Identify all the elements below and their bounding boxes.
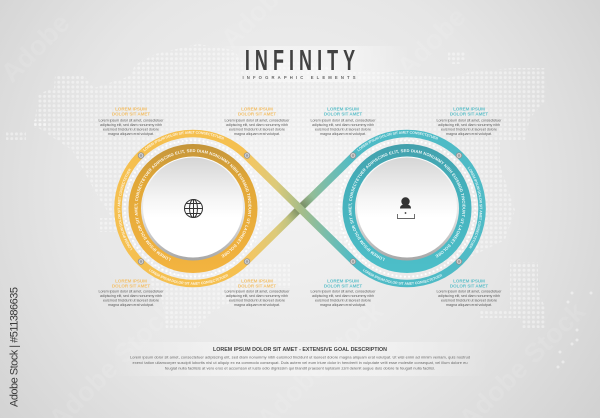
text block: teal top left: adipiscing elit, sed diam nonummy nibh xyxy=(312,123,374,127)
infinity diagram xyxy=(114,130,486,288)
icon: globe xyxy=(184,200,202,218)
text block: teal bottom left: Lorem ipsum dolor sit amet, consectetuer xyxy=(310,290,376,294)
text block: orange top right: DOLOR SIT AMET xyxy=(238,112,276,116)
text block: teal top left: Lorem ipsum dolor sit amet, consectetuer xyxy=(310,118,376,122)
text block: orange bottom left: Lorem ipsum dolor sit amet, consectetuer xyxy=(98,290,164,294)
dotted world map xyxy=(6,44,546,330)
right inner ring xyxy=(342,144,472,273)
right ring text: LOREM IPSUM DOLOR SIT AMET CONSECTETUER xyxy=(468,166,482,248)
text block: teal bottom right: Lorem ipsum dolor sit amet, consectetuer xyxy=(436,290,502,294)
text block: teal top left: euismod tincidunt ut laoreet dolore xyxy=(315,128,371,132)
text block: teal bottom left: DOLOR SIT AMET xyxy=(324,284,362,288)
text block: orange bottom right: LOREM IPSUM xyxy=(241,278,273,284)
text block: teal top right: DOLOR SIT AMET xyxy=(450,112,488,116)
description strip xyxy=(110,342,490,376)
text block: orange bottom right xyxy=(224,278,290,307)
description body: feugiat nulla facilisis at vero eros et accumsan et iusto odio dignissim qui blandit praesent luptatum zzril delenit augue duis dolore te feugait nulla facilisi. xyxy=(165,366,435,370)
text block: teal top right xyxy=(436,106,502,136)
text block: teal bottom left: adipiscing elit, sed diam nonummy nibh xyxy=(312,294,374,298)
description body: Lorem ipsum dolor sit amet, consectetuer adipiscing elit, sed diam nonummy nibh euismod tincidunt ut laoreet dolore magna aliquam erat volutpat. Ut wisi enim ad minim veniam, quis nostrud xyxy=(130,354,470,360)
title strip xyxy=(215,46,410,82)
text block: teal top right: adipiscing elit, sed diam nonummy nibh xyxy=(438,123,500,127)
crossing band: falling xyxy=(246,156,354,262)
text block: teal top right: Lorem ipsum dolor sit amet, consectetuer xyxy=(436,118,502,122)
text block: orange bottom right: euismod tincidunt ut laoreet dolore xyxy=(229,298,285,302)
text block: teal bottom right: adipiscing elit, sed diam nonummy nibh xyxy=(438,294,500,298)
description body xyxy=(130,354,470,370)
text block: orange bottom left: euismod tincidunt ut laoreet dolore xyxy=(103,298,159,302)
text block: orange top right: LOREM IPSUM xyxy=(241,106,273,112)
left ring text: LOREM IPSUM DOLOR SIT AMET CONSECTETUER xyxy=(118,168,132,250)
text block: teal bottom right: LOREM IPSUM xyxy=(453,278,485,284)
text block: orange top right: magna aliquam erat volutpat. xyxy=(234,132,280,136)
stock id vertical label: Adobe Stock | #511386635 xyxy=(8,287,20,407)
left outer band xyxy=(118,134,246,284)
map: eurasia xyxy=(300,60,546,262)
right ring text: LOREM IPSUM DOLOR SIT AMET CONSECTETUER xyxy=(357,131,438,152)
text block: orange bottom left: LOREM IPSUM xyxy=(115,278,147,284)
map: scattered dots east xyxy=(448,52,466,64)
left white disc xyxy=(141,156,245,260)
text block: orange top left: euismod tincidunt ut laoreet dolore xyxy=(103,128,159,132)
right ring text: LOREM IPSUM DOLOR SIT AMET CONSECTETUER xyxy=(362,268,442,285)
text block: orange top left: magna aliquam erat volutpat. xyxy=(108,132,154,136)
text block: orange bottom right: magna aliquam erat volutpat. xyxy=(234,303,280,307)
text block: orange bottom right: DOLOR SIT AMET xyxy=(238,284,276,288)
text block: orange bottom left: DOLOR SIT AMET xyxy=(112,284,150,288)
text block: teal top right: magna aliquam erat volutpat. xyxy=(446,132,492,136)
crossing shadow xyxy=(288,196,312,220)
right dotted ring xyxy=(339,140,475,277)
left ring text: LOREM IPSUM DOLOR SIT AMET CONSECTETUER xyxy=(143,131,224,152)
text block: orange bottom right: Lorem ipsum dolor sit amet, consectetuer xyxy=(224,290,290,294)
description body: exerci tation ullamcorper suscipit lobortis nisl ut aliquip ex ea commodo consequat. Duis autem vel eum iriure dolor in hendrerit in vulputate velit esse molestie consequat, vel illum dolore eu xyxy=(132,360,468,365)
text block: orange bottom left: adipiscing elit, sed diam nonummy nibh xyxy=(100,294,162,298)
text block: orange top left xyxy=(98,106,164,136)
text block: teal top left: DOLOR SIT AMET xyxy=(324,112,362,116)
subtitle: INFOGRAPHIC ELEMENTS xyxy=(242,75,356,80)
description heading: LOREM IPSUM DOLOR SIT AMET - EXTENSIVE GOAL DESCRIPTION xyxy=(213,347,387,353)
right ring text: LOREM IPSUM DOLOR SIT AMET, CONSECTETUER ADIPISCING ELIT, SED DIAM NONUMMY NIBH EUISMOD TINCIDUNT UT LAOREET DOLORE xyxy=(348,149,466,261)
map: isolated south-east dots xyxy=(556,292,592,368)
text block: teal bottom left: magna aliquam erat volutpat. xyxy=(320,303,366,307)
text block: orange top left: DOLOR SIT AMET xyxy=(112,112,150,116)
left dotted ring xyxy=(125,140,261,277)
left ring text xyxy=(118,131,252,285)
text block: teal top left xyxy=(310,106,376,136)
text block: orange bottom left xyxy=(98,278,164,307)
map: west coast islands xyxy=(6,120,46,140)
text block: teal top right: euismod tincidunt ut laoreet dolore xyxy=(441,128,497,132)
text block: teal bottom right xyxy=(436,278,502,307)
right white disc xyxy=(355,156,459,260)
text block: teal top left: LOREM IPSUM xyxy=(327,106,359,112)
text block: orange bottom right: adipiscing elit, sed diam nonummy nibh xyxy=(226,294,288,298)
map: south america xyxy=(100,218,290,330)
text block: orange top right: euismod tincidunt ut laoreet dolore xyxy=(229,128,285,132)
text block: teal bottom right: DOLOR SIT AMET xyxy=(450,284,488,288)
text block: teal bottom left: LOREM IPSUM xyxy=(327,278,359,284)
icon: person with tray xyxy=(397,197,415,219)
left inner ring xyxy=(128,144,258,273)
left ring text: LOREM IPSUM DOLOR SIT AMET CONSECTETUER xyxy=(148,268,228,285)
text block: teal bottom right: magna aliquam erat volutpat. xyxy=(446,303,492,307)
map: north america xyxy=(34,44,300,262)
text block: teal top left: magna aliquam erat volutpat. xyxy=(320,132,366,136)
text block: teal bottom left xyxy=(310,278,376,307)
title: INFINITY xyxy=(245,45,355,77)
text block: orange top left: LOREM IPSUM xyxy=(115,106,147,112)
text block: orange top right xyxy=(224,106,290,136)
text block: orange bottom left: magna aliquam erat volutpat. xyxy=(108,303,154,307)
right outer band xyxy=(354,134,482,284)
text block: orange top left: adipiscing elit, sed diam nonummy nibh xyxy=(100,123,162,127)
map: australia xyxy=(480,262,546,328)
text block: orange top right: Lorem ipsum dolor sit amet, consectetuer xyxy=(224,118,290,122)
text block: teal bottom left: euismod tincidunt ut laoreet dolore xyxy=(315,298,371,302)
watermarks: Adobe xyxy=(391,2,472,82)
text block: orange top left: Lorem ipsum dolor sit amet, consectetuer xyxy=(98,118,164,122)
left ring text: LOREM IPSUM DOLOR SIT AMET, CONSECTETUER ADIPISCING ELIT, SED DIAM NONUMMY NIBH EUISMOD TINCIDUNT UT LAOREET DOLORE xyxy=(134,149,252,261)
crossing band: rising xyxy=(246,156,354,262)
text block: teal bottom right: euismod tincidunt ut laoreet dolore xyxy=(441,298,497,302)
text block: teal top right: LOREM IPSUM xyxy=(453,106,485,112)
right ring text xyxy=(348,131,482,285)
text block: orange top right: adipiscing elit, sed diam nonummy nibh xyxy=(226,123,288,127)
bolts xyxy=(138,153,462,264)
